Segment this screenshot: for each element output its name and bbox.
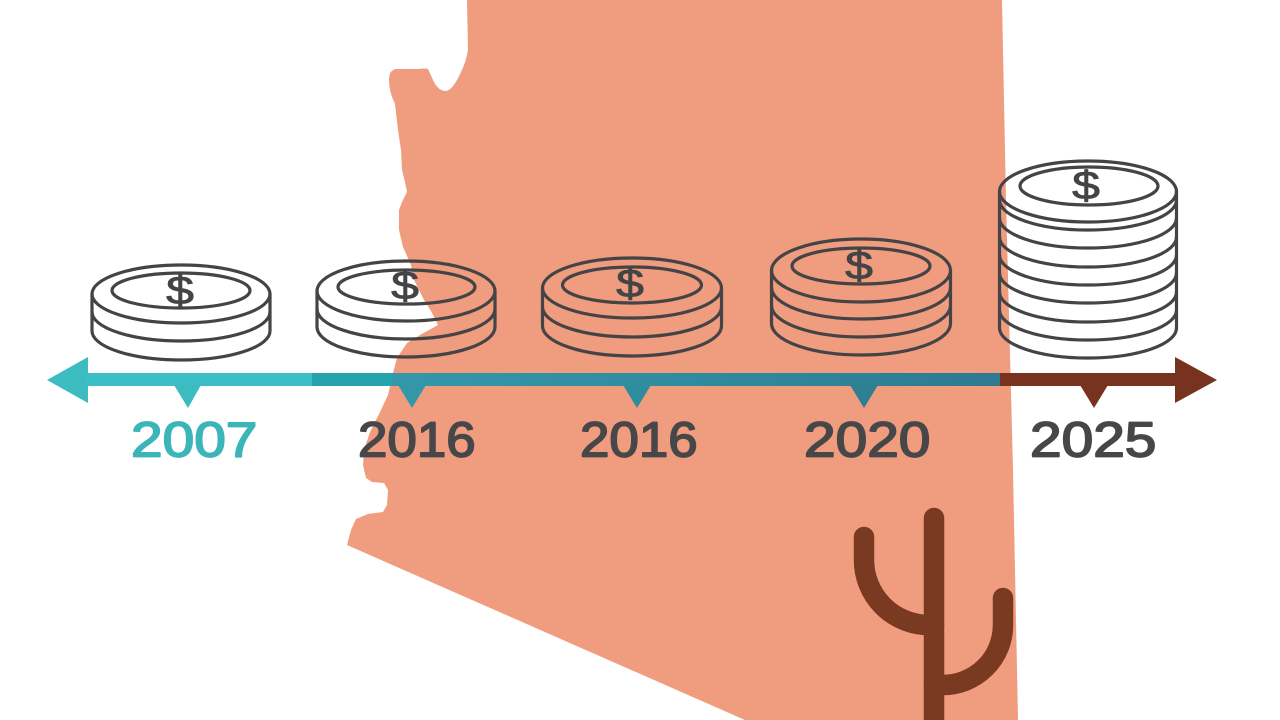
cactus right arm	[934, 598, 1003, 685]
coin stack 2025	[1000, 161, 1176, 358]
teal left arrowhead	[47, 357, 88, 403]
year label 2025: 2025	[1030, 413, 1156, 468]
cactus trunk	[924, 518, 944, 720]
brown right arrowhead	[1175, 357, 1217, 403]
timeline arrow	[47, 357, 1217, 408]
marker 2016 second	[623, 385, 651, 408]
dollar sign: $	[845, 243, 873, 288]
marker 2025	[1080, 385, 1108, 408]
dollar sign: $	[616, 261, 644, 306]
marker 2007	[174, 385, 201, 408]
coin stack 2007	[92, 265, 270, 360]
teal segment	[86, 373, 313, 386]
background map: Arizona silhouette	[347, 0, 1018, 720]
year label 2020: 2020	[804, 413, 930, 468]
cactus	[864, 518, 1003, 720]
dollar sign: $	[391, 263, 419, 308]
coin stack 2016 first	[317, 261, 495, 357]
year label 2007: 2007	[131, 413, 257, 468]
marker 2016 first	[398, 385, 426, 408]
blue-teal segment	[392, 373, 1001, 386]
year label 2016 first: 2016	[358, 412, 476, 467]
dollar sign: $	[1072, 163, 1100, 208]
dollar sign: $	[166, 268, 194, 313]
marker 2020	[850, 385, 878, 408]
cactus left arm	[864, 537, 934, 625]
coin stack 2016 second	[542, 258, 722, 356]
year label 2016 second: 2016	[580, 412, 698, 467]
brown segment	[1000, 373, 1178, 386]
darker teal segment	[312, 373, 392, 386]
coin stack 2020	[772, 239, 950, 355]
